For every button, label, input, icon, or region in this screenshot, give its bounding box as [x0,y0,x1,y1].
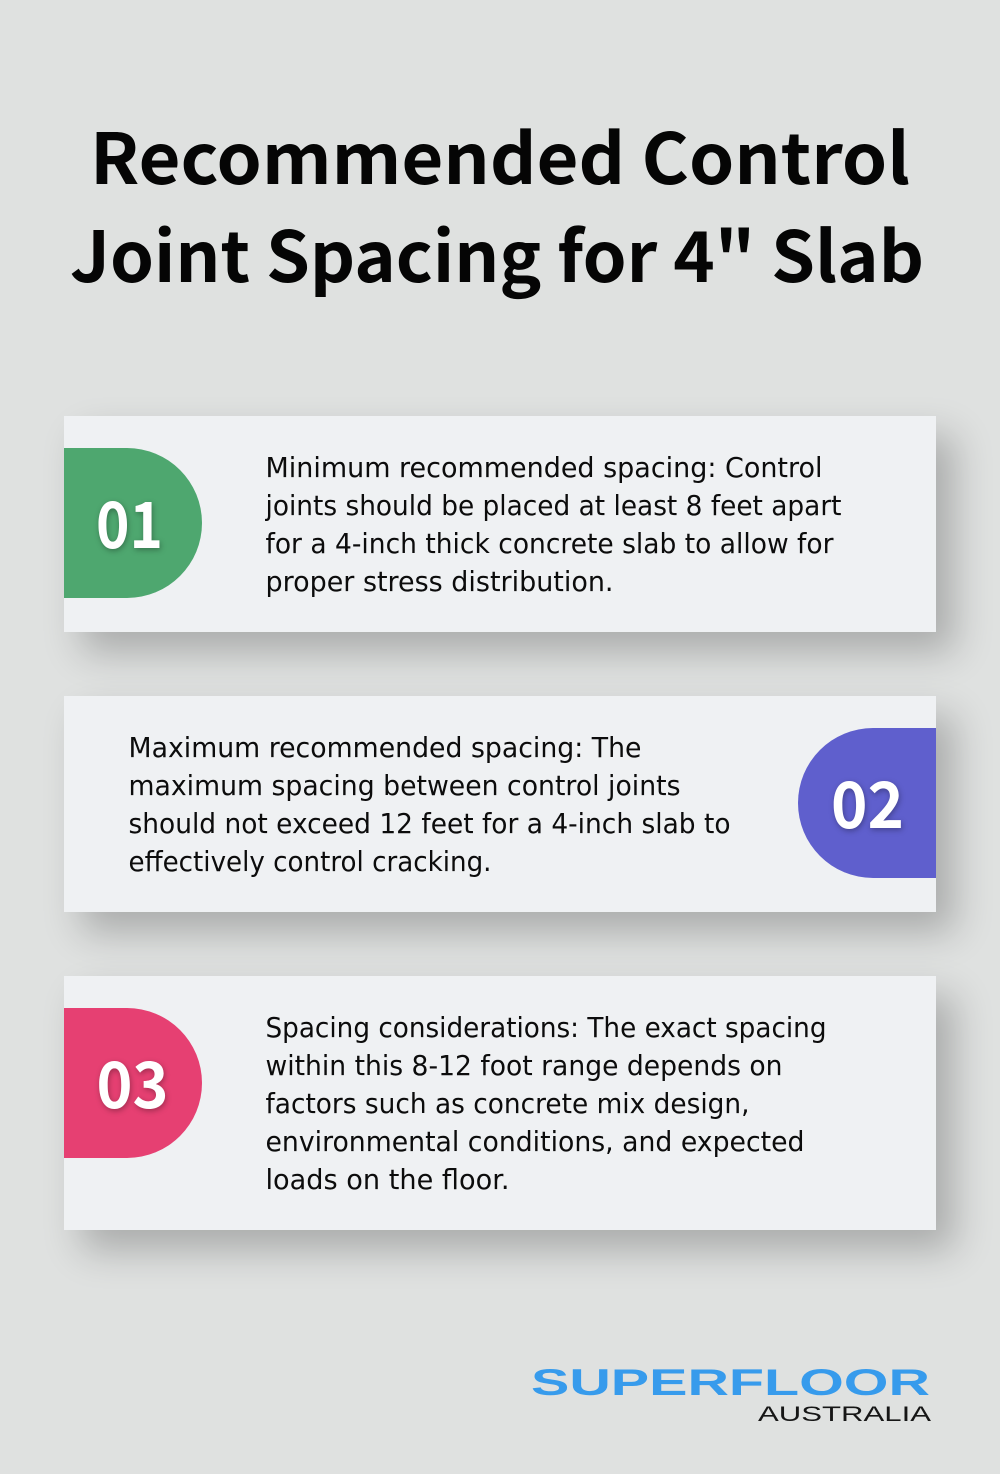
text block: minimum spacing: joints should be placed at least 8 feet apart [265,489,842,522]
title: Recommended Control [90,104,910,205]
text block: spacing considerations: within this 8-12 foot range depends on [266,1049,782,1082]
title [70,104,924,303]
text block: maximum spacing: maximum spacing between control joints [128,769,680,802]
badge: 02 [798,728,936,878]
text block: spacing considerations: factors such as concrete mix design, [266,1087,750,1120]
badge: 03 [64,1008,202,1158]
badge: 02: 02 [831,755,904,847]
logo: Superfloor Australia: AUSTRALIA [758,1403,931,1426]
text block: minimum spacing [265,451,842,598]
panel: step 01 minimum spacing [64,416,936,632]
badge: 01 [64,448,202,598]
badge: 03: 03 [96,1035,168,1127]
text block: minimum spacing: Minimum recommended spacing: Control [266,451,822,484]
logo: Superfloor Australia [531,1362,931,1426]
text block: spacing considerations [266,1011,826,1196]
text block: minimum spacing: for a 4-inch thick concrete slab to allow for [266,527,834,560]
text block: spacing considerations: Spacing considerations: The exact spacing [266,1011,826,1044]
text block: maximum spacing: effectively control cracking. [128,845,492,878]
title: Joint Spacing for 4" Slab [70,202,924,303]
panel: step 02 maximum spacing [64,696,936,912]
panel: step 03 spacing considerations [64,976,936,1230]
logo: Superfloor Australia: SUPERFLOOR [531,1362,930,1403]
text block: spacing considerations: environmental conditions, and expected [266,1125,804,1158]
text block: spacing considerations: loads on the floor. [266,1163,510,1196]
text block: minimum spacing: proper stress distribution. [266,565,614,598]
text block: maximum spacing: Maximum recommended spacing: The [128,731,642,764]
text block: maximum spacing: should not exceed 12 feet for a 4-inch slab to [128,807,730,840]
text block: maximum spacing [128,731,730,878]
badge: 01: 01 [96,475,163,567]
